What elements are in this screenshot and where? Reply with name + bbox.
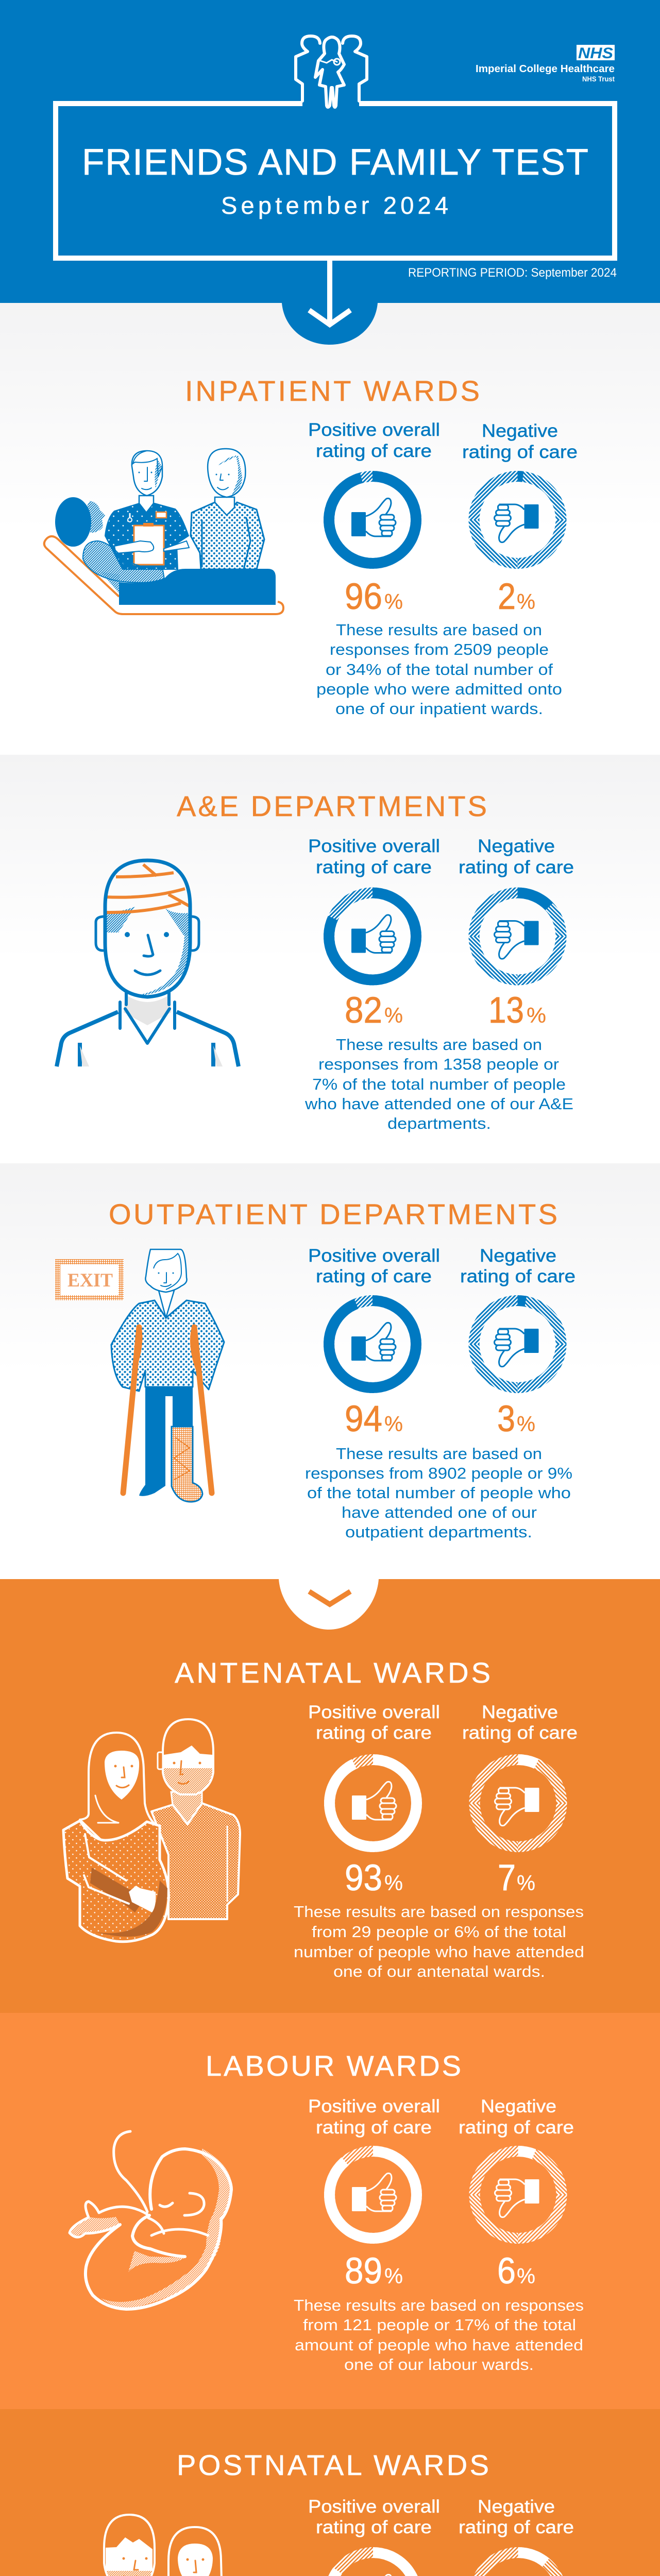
label: positive rating: rating of care: [316, 1266, 432, 1286]
illustration: unborn baby: [70, 2131, 231, 2309]
value: negative: 13: [488, 990, 524, 1031]
illustration: couple with newborn: [77, 2515, 247, 2576]
logo: trust name: NHS Trust: [582, 75, 615, 83]
title: FRIENDS AND FAMILY TEST: [82, 142, 588, 183]
value: negative: [498, 577, 535, 617]
value: positive: %: [384, 589, 403, 614]
value: positive: 82: [345, 990, 382, 1031]
donut: positive 89% with thumbs up: [324, 2146, 422, 2244]
donut: negative 6% with thumbs down: [469, 2146, 567, 2244]
value: negative: [497, 2251, 535, 2292]
text: response note: [305, 1445, 572, 1541]
label: positive rating: Positive overall: [308, 2497, 440, 2517]
value: positive: %: [384, 2264, 403, 2288]
text: response note: 7% of the total number of people: [312, 1075, 566, 1093]
label: negative rating: rating of care: [459, 857, 574, 877]
value: negative: 3: [497, 1399, 515, 1439]
label: negative rating: Negative: [478, 836, 555, 856]
value: positive: [345, 1858, 403, 1899]
heading: A&E DEPARTMENTS: [177, 790, 487, 822]
value: positive: 89: [345, 2251, 382, 2292]
text: response note: one of our labour wards.: [344, 2355, 534, 2374]
label: positive rating: rating of care: [316, 441, 432, 461]
label: positive rating: rating of care: [316, 2517, 432, 2537]
text: response note: [304, 1036, 573, 1132]
label: positive rating: [308, 836, 440, 877]
value: positive: %: [384, 1003, 403, 1027]
donut: positive 94% with thumbs up: [324, 1295, 421, 1393]
value: negative: 6: [497, 2251, 516, 2292]
logo: trust name: Imperial College Healthcare: [476, 63, 615, 75]
text: response note: responses from 1358 people or: [318, 1055, 559, 1073]
text: response note: people who were admitted onto: [316, 680, 562, 698]
label: positive rating: [308, 2096, 440, 2138]
value: negative: %: [527, 1003, 546, 1027]
label: negative rating: [460, 1246, 576, 1286]
label: negative rating: Negative: [480, 1246, 556, 1266]
label: negative rating: Negative: [482, 1702, 558, 1722]
label: negative rating: [462, 1702, 578, 1743]
illustration: patient, nurse and visitor: [44, 449, 283, 614]
text: response note: departments.: [387, 1114, 491, 1132]
text: response note: number of people who have attended: [294, 1943, 584, 1961]
subtitle: September 2024: [221, 192, 448, 219]
text: response note: [316, 621, 562, 718]
label: positive rating: Positive overall: [308, 2096, 440, 2116]
section: antenatal wards: [0, 1579, 660, 2013]
value: negative: %: [517, 589, 535, 614]
value: negative: %: [517, 2264, 535, 2288]
label: positive rating: Positive overall: [308, 420, 440, 440]
label: positive rating: [308, 420, 440, 461]
label: positive rating: rating of care: [316, 857, 432, 877]
label: negative rating: [462, 421, 578, 462]
value: positive: [345, 1399, 403, 1439]
text: response note: responses from 2509 people: [330, 640, 549, 658]
value: positive: 93: [345, 1858, 382, 1899]
heading: OUTPATIENT DEPARTMENTS: [109, 1198, 557, 1230]
text: response note: from 121 people or 17% of the total: [303, 2316, 576, 2334]
illustration: man on crutches with exit sign: EXIT: [67, 1270, 113, 1291]
label: positive rating: Positive overall: [308, 1702, 440, 1722]
arrow: header down tab: [282, 261, 378, 345]
label: negative rating: rating of care: [462, 442, 578, 462]
donut: negative 13% with thumbs down: [469, 887, 567, 985]
text: response note: These results are based on: [336, 621, 542, 639]
heading: LABOUR WARDS: [206, 2049, 461, 2082]
donut: negative 3% with thumbs down: [469, 1295, 567, 1393]
value: positive: %: [384, 1871, 403, 1895]
label: positive rating: Positive overall: [308, 1246, 440, 1266]
text: response note: have attended one of our: [342, 1503, 537, 1521]
text: response note: from 29 people or 6% of the total: [312, 1923, 566, 1941]
label: positive rating: rating of care: [316, 2117, 432, 2138]
label: negative rating: rating of care: [459, 2517, 574, 2537]
value: negative: 7: [498, 1858, 516, 1899]
text: response note: outpatient departments.: [345, 1523, 532, 1541]
value: negative: %: [517, 1412, 535, 1436]
text: response note: These results are based on responses: [294, 2296, 584, 2314]
text: response note: [294, 2296, 584, 2374]
text: response note: amount of people who have attended: [295, 2336, 583, 2354]
value: negative: [498, 1858, 535, 1899]
reporting period: REPORTING PERIOD: September 2024: [408, 266, 617, 280]
icon: family figures: [296, 36, 367, 107]
text: response note: one of our inpatient wards.: [335, 700, 543, 718]
section: inpatient wards: [0, 303, 660, 755]
label: positive rating: [308, 1702, 440, 1743]
text: response note: These results are based on: [336, 1036, 542, 1054]
donut: positive 85% with thumbs up: [324, 2547, 422, 2576]
text: response note: These results are based on responses: [294, 1903, 584, 1921]
text: response note: responses from 8902 people or 9%: [305, 1464, 572, 1482]
label: positive rating: Positive overall: [308, 836, 440, 856]
text: response note: These results are based on: [336, 1445, 542, 1463]
value: positive: 96: [345, 577, 382, 617]
value: positive: [345, 990, 403, 1031]
label: negative rating: [459, 2096, 574, 2138]
title frame: [56, 104, 615, 258]
text: response note: one of our antenatal wards.: [333, 1962, 545, 1980]
section: outpatient departments: [0, 1163, 660, 1579]
donut: positive 96% with thumbs up: [324, 471, 421, 569]
text: response note: of the total number of people who: [307, 1484, 571, 1502]
text: response note: who have attended one of our A&E: [304, 1095, 573, 1113]
value: negative: 2: [498, 577, 516, 617]
label: negative rating: rating of care: [460, 1266, 576, 1286]
text: response note: [294, 1903, 584, 1980]
logo: trust name: [476, 63, 615, 83]
section: A&E departments: [0, 755, 660, 1163]
arrow: orange section tab: [279, 1579, 379, 1630]
label: positive rating: rating of care: [316, 1723, 432, 1743]
text: response note: or 34% of the total number of: [326, 660, 553, 679]
header panel: [0, 0, 660, 303]
label: negative rating: rating of care: [462, 1723, 578, 1743]
illustration: man on crutches with exit sign: [58, 1249, 224, 1502]
value: positive: [345, 2251, 403, 2292]
donut: negative 7% with thumbs down: [469, 1754, 567, 1852]
illustration: expectant couple: [63, 1719, 240, 1942]
value: positive: [345, 577, 403, 617]
donut: negative 2% with thumbs down: [469, 471, 567, 569]
value: negative: [497, 1399, 535, 1439]
donut: positive 93% with thumbs up: [324, 1754, 422, 1852]
label: negative rating: [459, 2497, 574, 2537]
label: positive rating: [308, 1246, 440, 1286]
label: positive rating: [308, 2497, 440, 2537]
donut: negative 11% with thumbs down: [469, 2547, 567, 2576]
label: negative rating: Negative: [481, 2096, 556, 2116]
value: negative: %: [517, 1871, 535, 1895]
illustration: man with bandaged head: [57, 860, 239, 1066]
value: positive: 94: [345, 1399, 382, 1439]
section: postnatal wards: [0, 2409, 660, 2576]
heading: POSTNATAL WARDS: [177, 2449, 489, 2481]
heading: INPATIENT WARDS: [185, 375, 480, 407]
label: negative rating: Negative: [482, 421, 558, 441]
section: labour wards: [0, 2013, 660, 2409]
label: negative rating: [459, 836, 574, 877]
value: positive: %: [384, 1412, 403, 1436]
label: negative rating: rating of care: [459, 2117, 574, 2138]
heading: ANTENATAL WARDS: [175, 1656, 490, 1689]
label: negative rating: Negative: [478, 2497, 555, 2517]
logo: NHS: NHS: [578, 45, 613, 62]
donut: positive 82% with thumbs up: [324, 887, 421, 985]
